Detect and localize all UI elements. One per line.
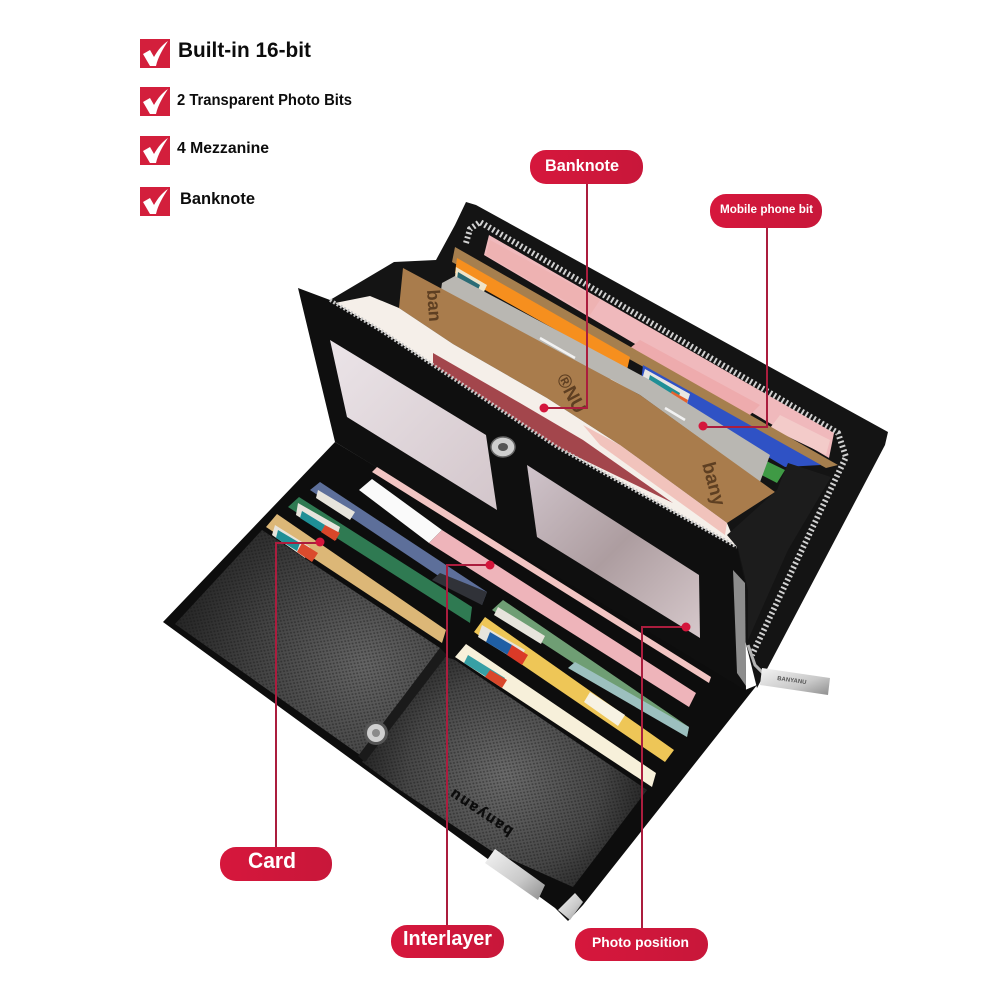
card: blue	[310, 482, 487, 605]
check item: Built-in 16-bit: Built-in 16-bit	[178, 38, 311, 62]
side gusset	[727, 463, 831, 640]
callout: Mobile phone bit: Mobile phone bit	[720, 202, 813, 216]
lower body	[163, 442, 757, 921]
callout: Banknote	[530, 150, 643, 412]
card: tan	[266, 514, 446, 643]
photo window one	[330, 340, 497, 510]
callout: Photo position	[575, 622, 708, 961]
brown suede pocket: bany	[697, 460, 729, 509]
callout: Banknote: Banknote	[545, 156, 619, 175]
left pebbled flap	[175, 530, 440, 755]
callout: Card: Card	[248, 848, 296, 873]
phone	[441, 276, 770, 482]
callout: Mobile phone bit	[698, 194, 822, 430]
blue card	[641, 365, 821, 467]
snap button	[364, 721, 388, 745]
zipper pull: BANYANU	[777, 676, 807, 686]
back banknote	[484, 235, 834, 458]
small metal tip	[558, 893, 583, 920]
photo window two	[527, 465, 700, 638]
back panel with zipper	[330, 202, 888, 688]
callout: Card	[220, 538, 332, 881]
callout: Photo position: Photo position	[592, 934, 689, 950]
check item: 2 Transparent Photo Bits	[140, 87, 352, 116]
callout: Interlayer	[391, 560, 504, 958]
card: green and white	[492, 600, 689, 737]
checklist	[140, 38, 352, 216]
check item: 2 Transparent Photo Bits: 2 Transparent Photo Bits	[177, 92, 352, 109]
green card edge	[752, 457, 785, 483]
card: cream	[455, 644, 656, 787]
check item: Built-in 16-bit	[140, 38, 311, 68]
front panel with photo windows	[298, 288, 746, 692]
snap button	[491, 437, 515, 457]
check item: 4 Mezzanine	[140, 136, 269, 165]
right pebbled pocket	[362, 655, 647, 887]
check item: Banknote	[140, 187, 255, 216]
interlayer banknote strip	[372, 467, 711, 683]
card: green	[288, 497, 472, 623]
orange card	[455, 258, 630, 370]
callout: Interlayer: Interlayer	[403, 928, 492, 950]
brown suede pocket: ®NU	[552, 370, 590, 417]
flap seam	[358, 648, 447, 762]
zipper pull	[748, 645, 830, 695]
brand mark: banyanu	[447, 785, 516, 840]
brown suede pocket: ban	[423, 289, 445, 322]
brown lining strip	[452, 247, 838, 468]
banknote stack	[335, 296, 737, 547]
metal corner plate	[485, 849, 545, 900]
check item: 4 Mezzanine: 4 Mezzanine	[177, 140, 269, 157]
brown suede pocket	[399, 268, 775, 523]
card: yellow	[474, 617, 674, 762]
check item: Banknote: Banknote	[180, 189, 255, 208]
wallet illustration	[163, 202, 888, 921]
